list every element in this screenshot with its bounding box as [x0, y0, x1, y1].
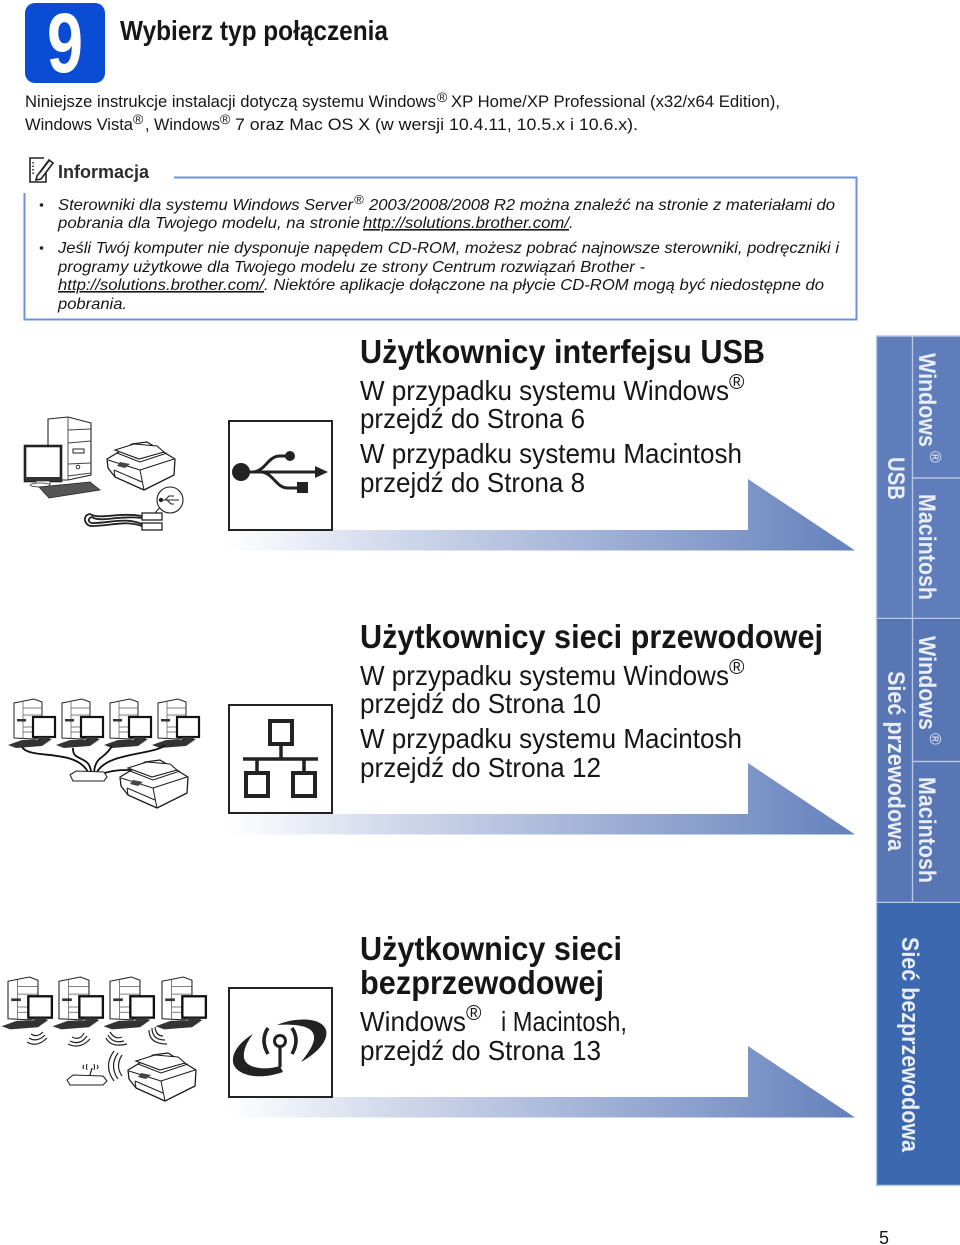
- side tab: wireless network: Sieć bezprzewodowa: [896, 937, 923, 1153]
- intro paragraph: XP Home/XP Professional (x32/x64 Edition),: [451, 92, 780, 111]
- text: wired network users: [360, 618, 823, 783]
- illustration: wireless network: [2, 977, 206, 1101]
- bullet one: [40, 192, 835, 232]
- arrow: wired section: [228, 763, 855, 834]
- text: USB users: Użytkownicy interfejsu USB: [360, 333, 765, 370]
- side tab: USB: USB: [882, 457, 909, 500]
- text: wireless network users: i Macintosh,: [501, 1006, 627, 1037]
- icon: USB symbol: [229, 421, 332, 530]
- icon: wireless symbol: [229, 988, 332, 1097]
- text: wired network users: przejdź do Strona 12: [360, 752, 601, 783]
- bullet one: 2003/2008/2008 R2 można znaleźć na stronie z materiałami do: [368, 197, 835, 214]
- intro paragraph: ®: [220, 111, 231, 127]
- bullet two: [40, 240, 839, 313]
- side tab: USB: Macintosh: [913, 494, 940, 600]
- text: wireless network users: przejdź do Strona 13: [360, 1035, 601, 1066]
- text: USB users: ®: [729, 371, 745, 394]
- wireless router: [67, 1064, 107, 1085]
- side tab: wired network: ®: [926, 733, 943, 745]
- panel: information note: [24, 158, 856, 320]
- intro paragraph: 7 oraz Mac OS X (w wersji 10.4.11, 10.5.x i 10.6.x).: [235, 115, 638, 134]
- arrow: wireless section: [228, 1046, 855, 1118]
- side tab: USB: Windows: [913, 353, 940, 447]
- text: USB users: W przypadku systemu Macintosh: [360, 438, 742, 469]
- side tab: wired network: Macintosh: [913, 777, 940, 883]
- text: wired network users: przejdź do Strona 10: [360, 688, 601, 719]
- arrow: USB section: [228, 479, 855, 550]
- monitor: [25, 446, 61, 487]
- bullet two: Jeśli Twój komputer nie dysponuje napędem CD-ROM, możesz pobrać najnowsze sterowniki, podręczniki i: [57, 240, 839, 257]
- bullet two: pobrania.: [57, 296, 127, 313]
- side tab: wired network: [876, 619, 960, 903]
- USB cable: [85, 505, 162, 530]
- text: wireless network users: Windows: [360, 1006, 466, 1037]
- bullet one: ®: [354, 192, 364, 207]
- note heading: Informacja: [58, 162, 150, 182]
- computers: [2, 977, 206, 1029]
- illustration: USB setup: [25, 417, 183, 530]
- side tab: wireless network: [876, 903, 960, 1186]
- bullet one: http://solutions.brother.com/: [363, 215, 571, 232]
- computers: [8, 699, 199, 748]
- network hub: [70, 771, 107, 781]
- wireless waves: [27, 1027, 167, 1081]
- text: USB users: [360, 333, 765, 498]
- printer: [107, 442, 175, 490]
- keyboard: [39, 482, 100, 498]
- icon: note and pencil: [30, 158, 53, 182]
- bullet two: http://solutions.brother.com/: [58, 277, 266, 294]
- intro paragraph: Windows Vista: [25, 115, 134, 134]
- text: wireless network users: [360, 930, 627, 1066]
- intro paragraph: , Windows: [145, 115, 220, 134]
- text: wired network users: W przypadku systemu Macintosh: [360, 723, 742, 754]
- bullet one: Sterowniki dla systemu Windows Server: [58, 197, 354, 214]
- note frame: [24, 178, 856, 320]
- intro paragraph: ®: [437, 89, 448, 105]
- computer tower: [48, 417, 91, 480]
- text: wired network users: W przypadku systemu Windows: [360, 660, 729, 691]
- text: USB users: W przypadku systemu Windows: [360, 375, 729, 406]
- intro paragraph: Niniejsze instrukcje instalacji dotyczą systemu Windows: [25, 92, 436, 111]
- text: wireless network users: Użytkownicy sieci: [360, 930, 622, 967]
- bullet two: . Niektóre aplikacje dołączone na płycie CD-ROM mogą być niedostępne do: [264, 277, 824, 294]
- text: USB users: przejdź do Strona 8: [360, 467, 585, 498]
- printer: [128, 1053, 196, 1101]
- step number badge: [25, 0, 105, 90]
- bullet one: .: [569, 215, 573, 232]
- icon: wired network symbol: [229, 705, 332, 813]
- USB callout circle: [157, 487, 183, 513]
- text: wired network users: ®: [729, 656, 745, 679]
- bullet two: programy użytkowe dla Twojego modelu ze strony Centrum rozwiązań Brother -: [57, 259, 645, 276]
- side tab: wired network: Sieć przewodowa: [882, 671, 909, 852]
- text: USB users: przejdź do Strona 6: [360, 403, 585, 434]
- text: wired network users: Użytkownicy sieci przewodowej: [360, 618, 823, 655]
- intro paragraph: [25, 89, 780, 134]
- network cables: [22, 745, 165, 774]
- title: Wybierz typ połączenia: [120, 15, 388, 46]
- printer: [120, 760, 188, 808]
- side tab: wired network: Windows: [913, 636, 940, 730]
- text: wireless network users: ®: [466, 1002, 482, 1025]
- bullet one: pobrania dla Twojego modelu, na stronie: [57, 215, 360, 232]
- side tab: USB: ®: [926, 451, 943, 463]
- illustration: wired network: [8, 699, 199, 808]
- intro paragraph: ®: [133, 111, 144, 127]
- side tab: USB: [876, 336, 960, 619]
- text: wireless network users: bezprzewodowej: [360, 964, 604, 1001]
